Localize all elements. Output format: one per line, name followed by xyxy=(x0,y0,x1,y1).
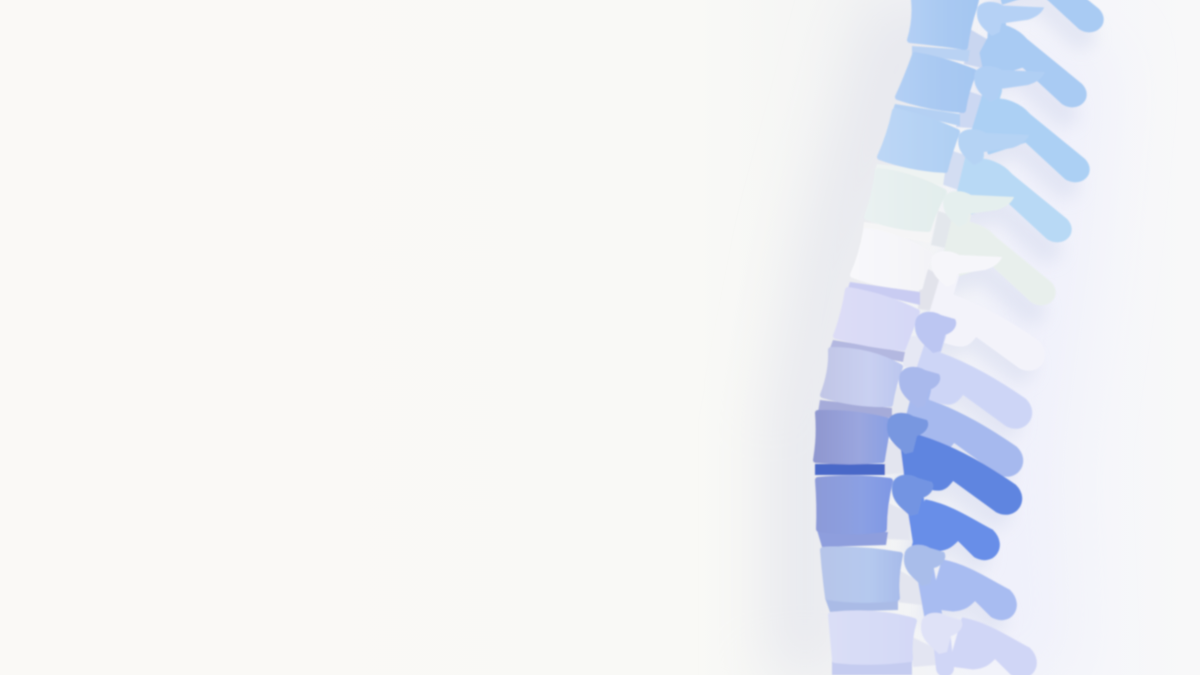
intervertebral discs xyxy=(815,46,970,675)
vertebra 4 xyxy=(867,171,944,229)
vertebral bodies xyxy=(816,0,976,662)
vertebra 2 xyxy=(898,55,974,110)
process 12 xyxy=(942,619,1035,675)
articular process 1 xyxy=(977,2,1044,36)
spine xyxy=(815,0,1102,675)
vertebra 9 xyxy=(818,478,890,532)
process 2 xyxy=(981,25,1085,106)
process 11 xyxy=(925,561,1015,625)
process 3 xyxy=(978,90,1088,181)
articular process 5 xyxy=(931,251,1002,287)
process 6 xyxy=(928,275,1044,369)
vertebra 1 xyxy=(910,0,976,47)
process 8 xyxy=(906,390,1022,475)
vertebra 3 xyxy=(880,111,957,170)
process 4 xyxy=(963,155,1070,241)
articular process 9 xyxy=(892,475,933,516)
articular process 11 xyxy=(921,613,962,654)
process 5 xyxy=(950,215,1054,304)
articular process 8 xyxy=(887,413,928,454)
vertebra 10 xyxy=(823,550,900,600)
foramina gaps between vertebrae xyxy=(883,28,992,667)
process 9 xyxy=(905,435,1021,513)
articular process 3 xyxy=(958,129,1029,165)
vertebra 7 xyxy=(823,350,900,404)
process 1 xyxy=(998,0,1102,31)
articular process 7 xyxy=(899,367,940,408)
process 10 xyxy=(913,500,998,560)
articular processes xyxy=(887,2,1045,654)
process 7 xyxy=(915,335,1031,427)
bluish glow right of spine xyxy=(950,0,1110,675)
spinous processes xyxy=(905,0,1102,675)
articular process 10 xyxy=(904,545,945,586)
articular process 2 xyxy=(974,66,1045,102)
articular process 6 xyxy=(915,312,956,353)
articular process 4 xyxy=(943,191,1014,227)
vertebra 8 xyxy=(816,413,889,462)
vertebra 5 xyxy=(853,231,930,287)
soft shadow left of spine xyxy=(770,0,970,675)
vertebra 6 xyxy=(836,290,917,348)
spinous process cast shadows xyxy=(894,0,1094,633)
vertebra 11 xyxy=(831,613,914,662)
